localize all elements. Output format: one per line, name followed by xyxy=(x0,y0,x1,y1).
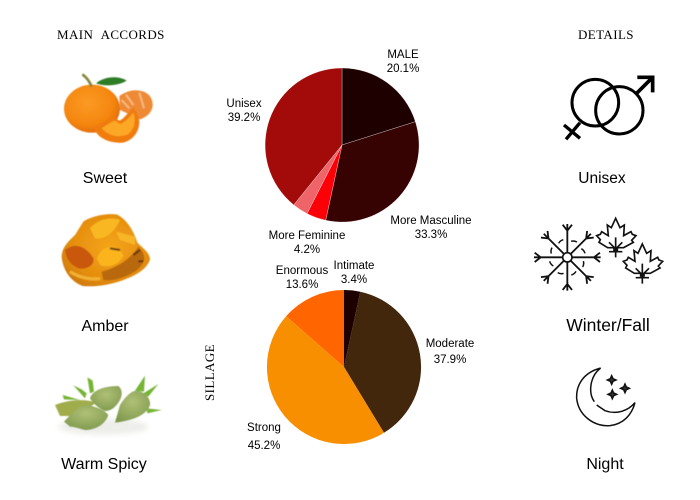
image: amber stone xyxy=(62,214,150,286)
label: male: MALE xyxy=(387,49,419,61)
heading: main accords: MAIN ACCORDS xyxy=(57,27,165,42)
label: winter/fall: Winter/Fall xyxy=(566,315,650,335)
icon: snowflake and maple leaves xyxy=(534,218,663,291)
label: night: Night xyxy=(586,456,624,473)
label: more masculine: 33.3% xyxy=(415,229,447,241)
label: enormous: Enormous xyxy=(276,265,328,277)
image: green cardamom pods xyxy=(55,376,162,435)
label: enormous: 13.6% xyxy=(286,279,318,291)
pie chart: sillage xyxy=(267,290,421,444)
label: intimate: Intimate xyxy=(334,260,374,272)
label: unisex: Unisex xyxy=(226,98,262,110)
label: unisex detail: Unisex xyxy=(578,170,626,187)
label: more feminine: 4.2% xyxy=(294,244,320,256)
label: warm spicy: Warm Spicy xyxy=(61,456,147,473)
label: intimate: 3.4% xyxy=(341,274,367,286)
label: more masculine: More Masculine xyxy=(390,215,472,227)
icon: crescent moon and stars xyxy=(577,368,635,426)
label: strong: Strong xyxy=(247,422,281,434)
label: amber: Amber xyxy=(81,318,129,335)
heading: details: DETAILS xyxy=(578,27,634,42)
label: moderate: Moderate xyxy=(426,338,474,350)
label: male: 20.1% xyxy=(387,63,419,75)
pie chart: gender split xyxy=(265,68,419,222)
icon: male and female symbols xyxy=(564,77,653,139)
heading: sillage: SILLAGE xyxy=(202,344,217,401)
label: more feminine: More Feminine xyxy=(269,230,345,242)
label: unisex: 39.2% xyxy=(228,112,260,124)
image: mandarin oranges xyxy=(64,74,153,143)
label: sweet: Sweet xyxy=(83,170,128,187)
label: moderate: 37.9% xyxy=(434,354,466,366)
label: strong: 45.2% xyxy=(248,440,280,452)
